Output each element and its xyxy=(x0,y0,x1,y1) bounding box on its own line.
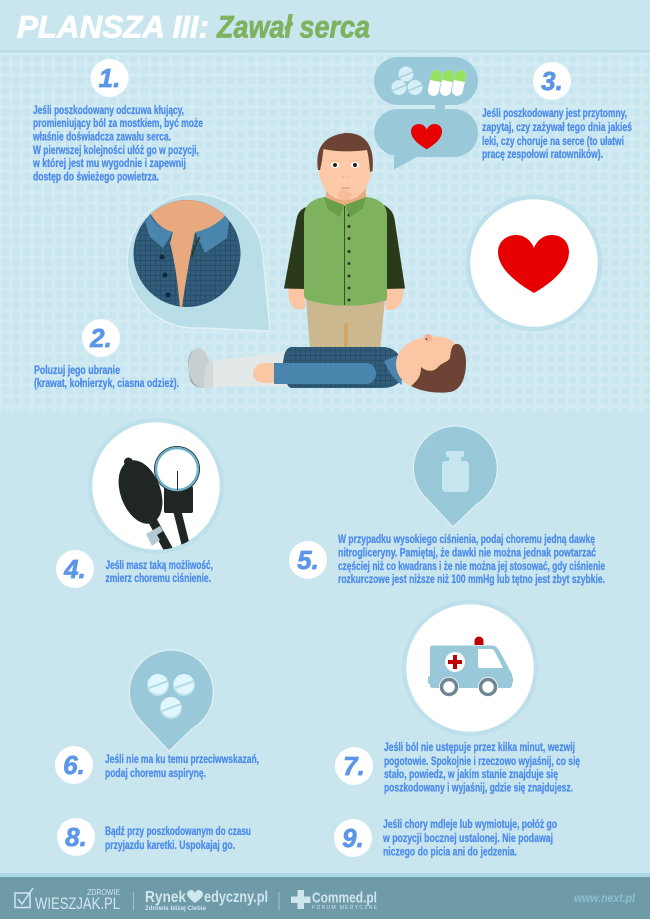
step 5 number xyxy=(289,541,327,579)
step 1 text xyxy=(32,105,203,184)
step 8 text: przyjazdu karetki. Uspokajaj go. xyxy=(105,840,235,852)
collar xyxy=(384,355,402,385)
step 3 number: 3. xyxy=(541,66,563,96)
step 1 text: właśnie doświadcza zawału serca. xyxy=(32,132,171,144)
step 8 text: Bądź przy poszkodowanym do czasu xyxy=(105,826,251,838)
pin: nitroglycerin bottle xyxy=(413,426,497,527)
logo: Zdrowie WieszJak.pl: ZDROWIE xyxy=(87,887,120,897)
brows, nose, mouth xyxy=(331,160,359,162)
step 4 text xyxy=(106,560,213,585)
icon: tablets xyxy=(392,66,422,95)
trousers xyxy=(306,298,385,350)
arm xyxy=(274,363,376,384)
step 1 number xyxy=(90,59,128,97)
step 2 number xyxy=(82,319,120,357)
step 9 text: niczego do picia ani do jedzenia. xyxy=(383,846,517,858)
step 1 text: W pierwszej kolejności ułóż go w pozycji, xyxy=(33,145,199,157)
step 6 text xyxy=(105,754,259,780)
head xyxy=(396,336,456,387)
step 6 text: podaj choremu aspirynę. xyxy=(105,768,206,780)
logo: Rynek Medyczny: edyczny.pl xyxy=(204,889,268,906)
sleeves xyxy=(284,207,306,289)
step 7 text xyxy=(384,742,580,794)
lying man xyxy=(188,334,466,393)
step 5 text xyxy=(338,534,605,586)
logo: Zdrowie WieszJak.pl xyxy=(15,887,120,913)
torso xyxy=(283,347,402,388)
step 2 number: 2. xyxy=(89,323,112,353)
step 9 number xyxy=(334,819,372,857)
step 2 text: Poluzuj jego ubranie xyxy=(34,365,120,377)
speech bubble: medicines xyxy=(374,57,478,111)
step 9 text xyxy=(382,819,557,858)
step 3 text: pracę zespołowi ratowników). xyxy=(482,149,603,161)
hair xyxy=(317,133,373,172)
step 1 text: promieniujący ból za mostkiem, być może xyxy=(33,118,203,130)
title: Zawał serca xyxy=(216,8,370,44)
footer xyxy=(0,873,650,919)
title xyxy=(17,8,370,44)
step 3 number xyxy=(533,62,571,100)
shoe xyxy=(188,348,209,388)
pin: aspirin tablets xyxy=(129,650,213,751)
step 8 number: 8. xyxy=(65,822,87,852)
step 4 number xyxy=(56,550,94,588)
step 7 number: 7. xyxy=(343,751,365,781)
step 2 text xyxy=(34,365,179,390)
icon: heart in circle xyxy=(468,197,600,329)
step 7 text: Jeśli ból nie ustępuje przez kilka minut, wezwij xyxy=(384,742,575,754)
logo: Zdrowie WieszJak.pl: WIESZJAK.PL xyxy=(35,894,120,913)
hair xyxy=(411,344,466,393)
icon: capsules xyxy=(427,69,467,97)
step 1 number: 1. xyxy=(99,63,120,93)
step 9 number: 9. xyxy=(342,823,364,853)
icon: blood pressure monitor xyxy=(90,420,222,556)
hand xyxy=(253,363,275,383)
step 8 number xyxy=(57,818,95,856)
title: PLANSZA III: xyxy=(17,8,209,44)
collar xyxy=(324,197,344,217)
hands xyxy=(288,288,305,310)
step 8 text xyxy=(105,826,251,852)
step 9 text: w pozycji bocznej ustalonej. Nie podawaj xyxy=(382,833,553,845)
step 9 text: Jeśli chory mdleje lub wymiotuje, połóż go xyxy=(383,819,557,831)
neck xyxy=(326,186,366,206)
step 2 text: (krawat, kołnierzyk, ciasna odzież). xyxy=(34,378,179,390)
step 4 number: 4. xyxy=(63,554,86,584)
step 7 text: stało, powiedz, w jakim stanie znajduje się xyxy=(384,769,558,781)
logo: Commed.pl: FORUM MEDYCZNE xyxy=(312,905,378,911)
speech bubble: heart xyxy=(374,109,478,170)
step 1 text: w której jest mu wygodnie i zapewnij xyxy=(32,158,186,170)
standing man xyxy=(284,133,405,350)
step 6 number: 6. xyxy=(63,750,85,780)
logo: Rynek Medyczny: Rynek xyxy=(145,889,186,906)
step 3 text xyxy=(482,108,632,161)
head xyxy=(318,148,372,200)
bubble: loosened collar xyxy=(127,194,270,331)
credit: www.next.pl: www.next.pl xyxy=(574,893,636,905)
step 5 number: 5. xyxy=(297,545,319,575)
step 1 text: dostęp do świeżego powietrza. xyxy=(33,172,159,184)
icon: ambulance xyxy=(404,602,536,734)
logo: Commed.pl xyxy=(291,890,378,911)
logo: Commed.pl: Commed.pl xyxy=(312,890,377,906)
logo: Rynek Medyczny: Zdrowie bliżej Ciebie xyxy=(145,905,206,912)
step 1 text: Jeśli poszkodowany odczuwa kłujący, xyxy=(33,105,184,117)
step 7 text: poszkodowany i wyjaśnij, gdzie się znajdujesz. xyxy=(384,782,573,794)
step 4 text: zmierz choremu ciśnienie. xyxy=(106,573,211,585)
shirt xyxy=(304,197,387,306)
step 7 text: pogotowie. Spokojnie i rzeczowo wyjaśnij, co się xyxy=(384,756,580,768)
eyes xyxy=(331,162,339,168)
step 6 text: Jeśli nie ma ku temu przeciwwskazań, xyxy=(105,754,259,766)
step 7 number xyxy=(335,747,373,785)
trousers xyxy=(203,352,287,387)
step 6 number xyxy=(55,746,93,784)
step 4 text: Jeśli masz taką możliwość, xyxy=(106,560,213,572)
logo: Rynek Medyczny xyxy=(134,889,279,912)
